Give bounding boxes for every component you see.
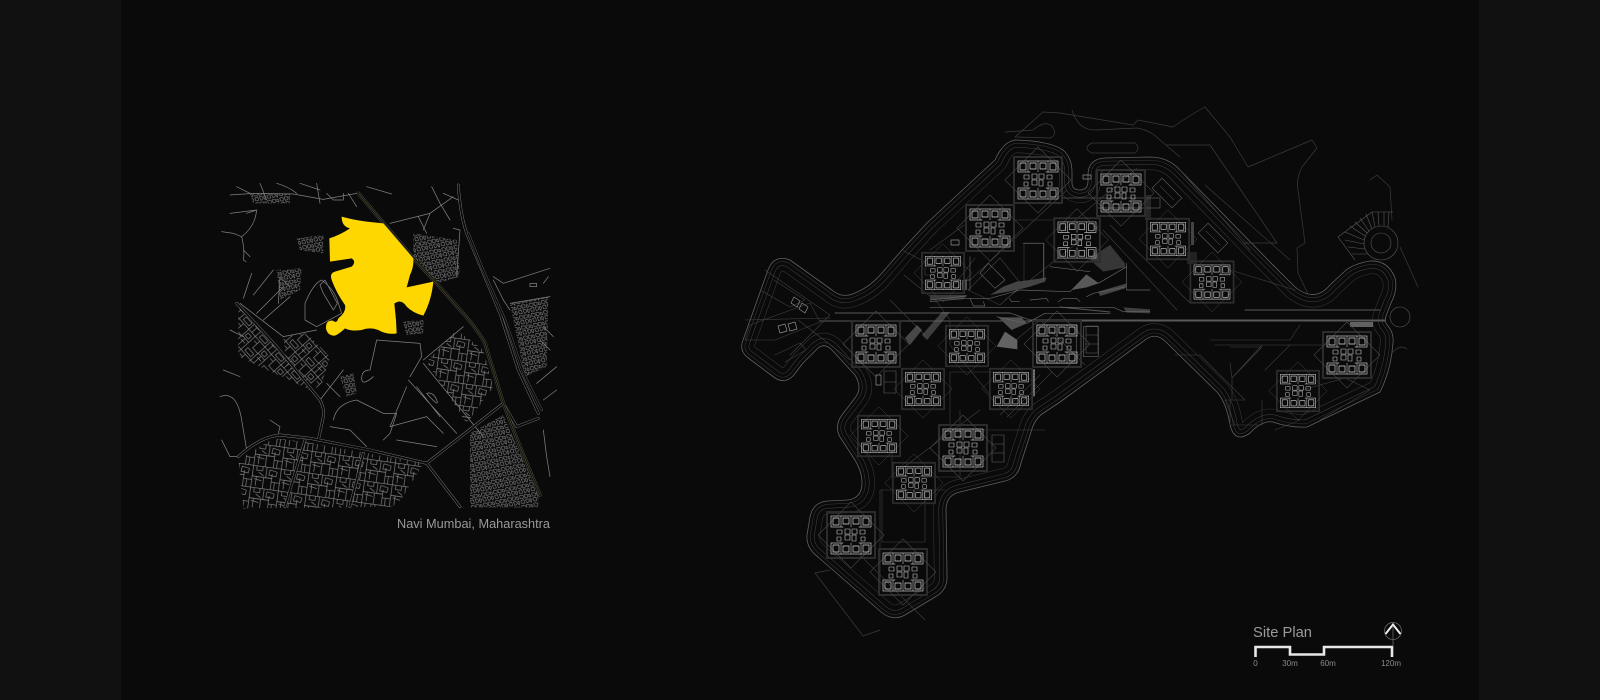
- block 15: [850, 407, 908, 465]
- inner road lines: [742, 140, 1396, 618]
- residential blocks: [818, 147, 1380, 605]
- panel: location map: [220, 183, 557, 508]
- dense urban street blocks: [238, 193, 548, 508]
- internal diagonals and plot outlines: [745, 168, 1370, 620]
- block 6: [938, 317, 996, 375]
- site plan heading: Site Plan: [1253, 624, 1312, 641]
- block 13: [894, 360, 952, 418]
- motorway with olive centre line: [358, 193, 540, 495]
- panel: site plan: [742, 107, 1418, 636]
- scale bar: 0: [1253, 659, 1258, 668]
- central spine road: [820, 307, 1385, 321]
- block 16: [930, 415, 996, 481]
- block 2: [957, 195, 1023, 261]
- plaza filled shapes: [930, 245, 1150, 349]
- surrounding context lines: [815, 107, 1418, 636]
- block 4: [1046, 209, 1108, 271]
- scale bar: [1253, 647, 1401, 668]
- pod and small pavilion blocks: [778, 175, 1160, 385]
- site boundary road: [742, 140, 1396, 618]
- scale bar: 60m: [1320, 659, 1336, 668]
- block 5: [843, 311, 909, 377]
- scale bar: 30m: [1282, 659, 1298, 668]
- hatched service strips: [905, 195, 1373, 345]
- block 7: [1024, 311, 1090, 377]
- scale bar: 120m: [1381, 659, 1401, 668]
- block 17: [885, 454, 943, 512]
- block 9: [1139, 210, 1197, 268]
- map caption: Navi Mumbai, Maharashtra: [397, 516, 551, 531]
- block 12: [1269, 362, 1327, 420]
- rotated tennis courts: [884, 178, 1228, 462]
- central plaza terraces: [930, 243, 1150, 397]
- block 8: [1088, 160, 1154, 226]
- block 1: [1005, 147, 1071, 213]
- highways and double-line roads: [237, 185, 538, 507]
- block 3: [914, 244, 972, 302]
- block 14: [982, 360, 1040, 418]
- block 11: [1314, 322, 1380, 388]
- block 19: [870, 539, 936, 605]
- site highlight: yellow plot: [326, 217, 433, 336]
- street network: [220, 183, 557, 477]
- icon: north arrow: [1384, 622, 1402, 646]
- block 18: [818, 502, 884, 568]
- block 10: [1182, 252, 1242, 312]
- roundabout and landscape fan: [1338, 212, 1410, 327]
